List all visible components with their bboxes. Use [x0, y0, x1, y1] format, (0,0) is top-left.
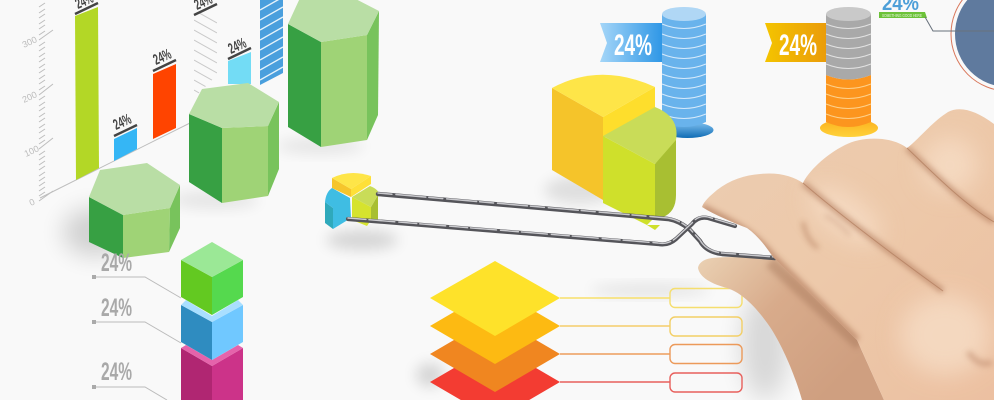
blue ribbon label — [600, 23, 662, 62]
hexagon prism small — [89, 163, 180, 258]
blue cube — [181, 300, 243, 360]
top right callout — [879, 0, 927, 18]
top right circle — [925, 0, 994, 91]
large pie chart pieces — [552, 75, 677, 230]
axis numbers: 300 — [21, 34, 38, 50]
cube callouts: 24% — [101, 358, 132, 386]
lime piece — [603, 107, 677, 230]
stacked cubes — [181, 242, 243, 400]
axis numbers: 100 — [23, 143, 40, 159]
bar chart — [75, 0, 283, 180]
finger creases and knuckle shading — [702, 148, 994, 364]
bar labels — [73, 0, 251, 136]
hand: thumb — [698, 257, 884, 400]
orange and grey cylinder — [820, 7, 878, 137]
yellow piece — [552, 75, 655, 200]
small pie chart held by tweezers — [325, 173, 378, 229]
orange ribbon label: 24% — [779, 29, 817, 62]
bar labels: 24% — [151, 46, 174, 69]
hand: palm and fingers — [695, 100, 994, 400]
axis numbers: 0 — [28, 197, 36, 208]
soft drop shadows — [63, 138, 789, 400]
hexagon prism large — [288, 0, 379, 147]
magenta cube — [181, 345, 243, 400]
cube callouts: 24% — [101, 294, 132, 322]
tweezers — [348, 193, 775, 258]
green cube — [181, 242, 243, 315]
bar labels: 24% — [111, 111, 134, 134]
top right callout: SOMETHING GOOD HERE — [882, 13, 922, 18]
finger highlights — [799, 137, 990, 375]
axis scale — [39, 3, 190, 201]
axis numbers — [21, 34, 40, 208]
diamond leader lines and empty boxes — [560, 288, 742, 392]
finger crease lines — [803, 148, 994, 291]
blue cylinder — [662, 7, 714, 138]
cube callouts: 24% — [101, 249, 132, 277]
hexagon prism medium — [189, 83, 279, 203]
blue ribbon label: 24% — [614, 29, 652, 62]
bar labels: 24% — [226, 35, 249, 58]
cube callouts — [92, 249, 181, 400]
axis numbers: 200 — [21, 89, 38, 105]
layered diamonds — [430, 261, 560, 400]
orange ribbon label — [765, 23, 826, 62]
